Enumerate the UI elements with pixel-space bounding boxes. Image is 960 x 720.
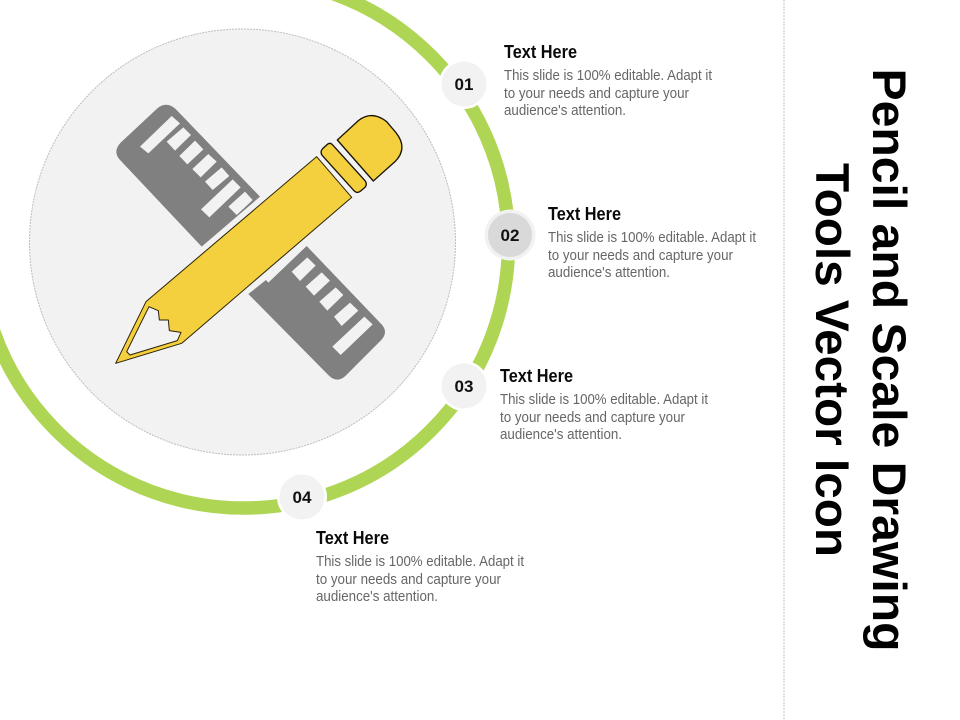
- text block 04: [316, 528, 525, 605]
- text block 04: audience's attention.: [316, 588, 438, 605]
- node 03: [439, 361, 489, 411]
- pencil body: [116, 157, 352, 363]
- grey central circle: [30, 29, 456, 455]
- text block 02: Text Here: [548, 204, 621, 224]
- text block 01: Text Here: [504, 42, 577, 62]
- text block 03: to your needs and capture your: [500, 409, 685, 426]
- node 01: [439, 59, 489, 109]
- text block 03: This slide is 100% editable. Adapt it: [500, 391, 709, 408]
- text block 02: [548, 204, 757, 281]
- text block 02: to your needs and capture your: [548, 247, 733, 264]
- title: Pencil and Scale Drawing: [863, 68, 916, 652]
- text block 01: audience's attention.: [504, 102, 626, 119]
- text block 02: This slide is 100% editable. Adapt it: [548, 229, 757, 246]
- title: [806, 68, 916, 652]
- text block 04: Text Here: [316, 528, 389, 548]
- pencil band: [321, 143, 366, 192]
- pencil eraser: [337, 116, 402, 181]
- text block 02: audience's attention.: [548, 264, 670, 281]
- ruler lower part: [248, 246, 385, 380]
- title: Tools Vector Icon: [806, 163, 859, 557]
- text block 01: [504, 42, 713, 119]
- ruler upper part: [116, 105, 260, 247]
- node 01: 01: [455, 75, 473, 94]
- text block 01: This slide is 100% editable. Adapt it: [504, 67, 713, 84]
- text block 03: Text Here: [500, 366, 573, 386]
- text block 01: to your needs and capture your: [504, 85, 689, 102]
- node 04: 04: [293, 488, 312, 507]
- node 03: 03: [455, 377, 473, 396]
- green ring: [0, 0, 509, 508]
- node 04: [277, 472, 327, 522]
- node 02: 02: [501, 226, 519, 245]
- pencil tip: [127, 307, 181, 355]
- icon: pencil and ruler: [116, 105, 402, 380]
- node 02: [484, 210, 536, 260]
- text block 04: This slide is 100% editable. Adapt it: [316, 553, 525, 570]
- text block 03: [500, 366, 709, 443]
- text block 04: to your needs and capture your: [316, 571, 501, 588]
- text block 03: audience's attention.: [500, 426, 622, 443]
